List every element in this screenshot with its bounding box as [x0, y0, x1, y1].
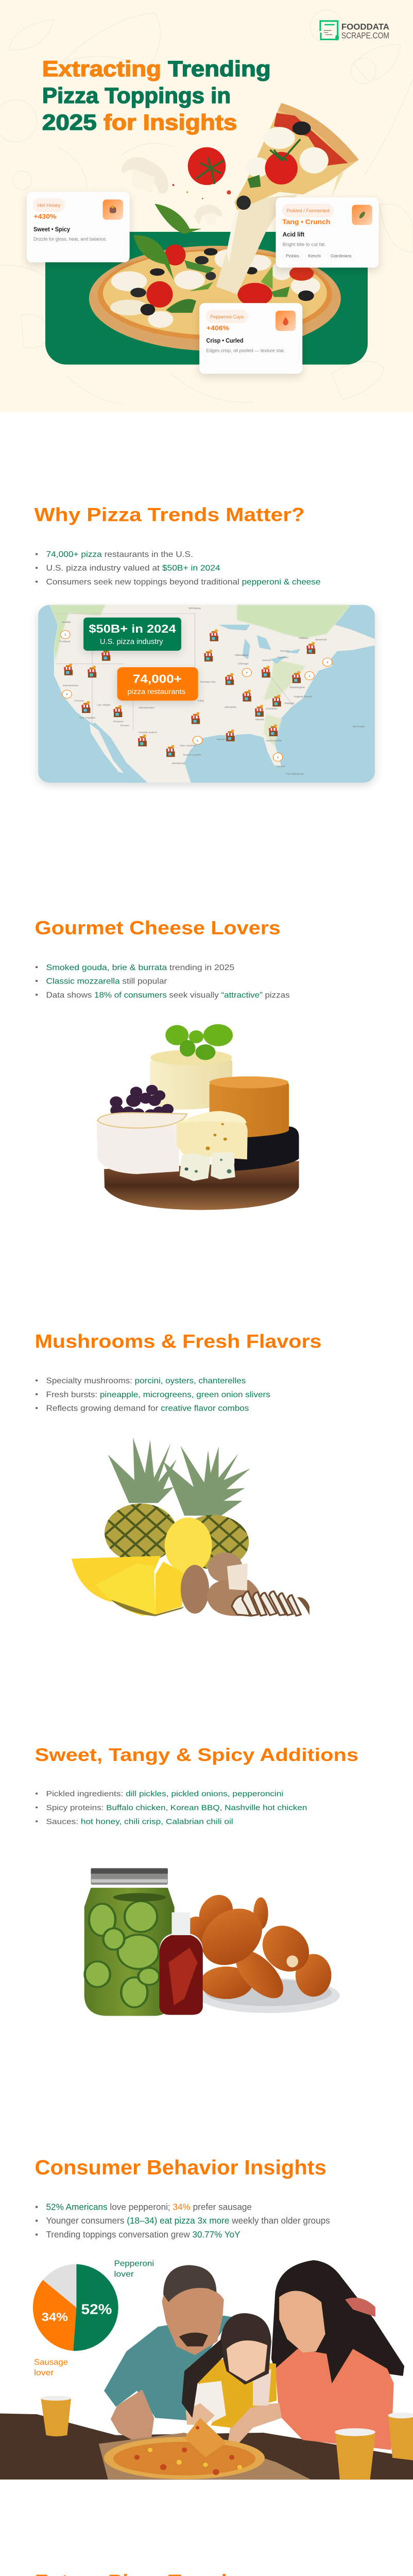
blue cheese cubes — [180, 1153, 211, 1181]
heading: Sweet, Tangy & Spicy Additions — [35, 1745, 358, 1765]
city labels: Albuquerque — [139, 706, 154, 709]
callout: 74,000+ — [117, 667, 198, 701]
bullet list: Data shows 18% of consumers seek visually “attractive” pizzas — [46, 990, 290, 999]
bullet list — [36, 1789, 307, 1826]
heading: Gourmet Cheese Lovers — [35, 917, 281, 939]
store markers — [64, 629, 316, 757]
city labels: Detroit — [262, 659, 271, 662]
top cream cheese — [150, 1050, 232, 1110]
card description: Edges crisp, oil pooled — texture star. — [206, 348, 285, 353]
title: Pizza Toppings in — [42, 83, 231, 108]
city labels: Virginia Beach — [294, 696, 312, 698]
panel: why pizza trends matter — [34, 503, 375, 783]
bullet list: Classic mozzarella still popular — [46, 976, 167, 986]
city labels: Los Angeles — [79, 717, 95, 720]
basil — [165, 1024, 233, 1060]
city labels: Bermuda — [353, 725, 365, 728]
callout: 74,000+: 74,000+ — [133, 672, 182, 686]
city labels: Montréal — [315, 638, 326, 641]
bullet list: 74,000+ pizza restaurants in the U.S. — [46, 549, 193, 559]
pineapple halves and wedges — [165, 1517, 212, 1573]
cluster markers: 2 — [197, 739, 198, 742]
bullet list: Sauces: hot honey, chili crisp, Calabrian chili oil — [46, 1817, 233, 1826]
heading: Consumer Behavior Insights — [35, 2156, 326, 2179]
grapes — [110, 1085, 174, 1121]
woman arm — [228, 2403, 282, 2445]
callout: 74,000+: pizza restaurants — [128, 688, 185, 696]
bullet list: 52% Americans love pepperoni; 34% prefer sausage — [46, 2202, 252, 2212]
illustration: chili oil bottle — [159, 1912, 203, 2015]
paper cups — [41, 2398, 71, 2436]
city labels: Hamilton — [277, 656, 288, 659]
city labels: Chicago — [238, 663, 249, 665]
city labels: Baton Rouge — [217, 738, 234, 741]
title: Extracting Trending — [42, 57, 271, 81]
city labels: Ottawa — [299, 637, 308, 640]
man hand — [111, 2389, 154, 2443]
illustration: cheese board — [97, 1024, 299, 1210]
pineapple bodies — [105, 1503, 177, 1563]
label: pepperoni lover: Pepperoni — [114, 2259, 154, 2268]
card description: Drizzle for gloss, heat, and balance. — [33, 236, 107, 242]
bullet list: Smoked gouda, brie & burrata trending in 2025 — [46, 962, 234, 972]
icon: flame — [276, 311, 296, 331]
stat: +406%: +406% — [206, 324, 230, 332]
pizza — [104, 2437, 265, 2479]
illustration: whole pizza — [89, 235, 341, 351]
panel: mushrooms and fresh flavors — [35, 1330, 322, 1616]
stat: +430%: +430% — [33, 213, 57, 220]
city labels: Sacramento — [63, 684, 78, 687]
girl vest and hoodie — [189, 2359, 277, 2428]
chips: Pickles — [286, 253, 299, 258]
title: 2025 for Insights — [42, 110, 237, 135]
illustration: flying mushrooms, tomato and basil — [121, 147, 231, 234]
woman face — [279, 2291, 325, 2352]
city labels: Tulsa — [197, 700, 204, 702]
cluster markers: 2 — [66, 693, 68, 696]
callout: $50B+: $50B+ in 2024 — [89, 623, 176, 636]
city labels: Memphis — [225, 706, 236, 709]
cluster markers: 2 — [326, 661, 328, 664]
background food doodles — [0, 10, 413, 405]
bullet list: Fresh bursts: pineapple, microgreens, green onion slivers — [46, 1389, 270, 1399]
girl head — [220, 2313, 271, 2385]
logo: FoodData Scrape — [320, 21, 389, 41]
city labels: Monterrey — [172, 762, 185, 765]
cheese wedge — [177, 1111, 248, 1159]
label: pepperoni lover — [114, 2259, 154, 2279]
card heading: Sweet • Spicy — [33, 226, 70, 233]
city labels: Las Vegas — [97, 704, 111, 707]
city labels: San Antonio — [180, 744, 196, 748]
bullet list: Specialty mushrooms: porcini, oysters, chanterelles — [46, 1376, 246, 1385]
city labels: The Bahamas — [286, 773, 304, 775]
icon: honey pot — [102, 199, 123, 220]
cluster markers — [61, 631, 332, 761]
bullet list — [36, 1376, 270, 1413]
pill: Hot Honey — [33, 199, 64, 212]
pizza box — [99, 2433, 311, 2480]
illustration: family sharing pizza — [0, 2260, 413, 2480]
panel: gourmet cheese lovers — [35, 917, 299, 1210]
city labels — [59, 607, 365, 775]
logo: FoodData Scrape: FOODDATA — [341, 23, 389, 32]
callout: $50B+ — [83, 618, 181, 651]
label: sausage lover: Sausage — [34, 2358, 68, 2367]
city labels: Miami — [277, 765, 285, 768]
card: Hot Honey — [27, 192, 130, 262]
city labels: Nuevo Laredo — [183, 754, 201, 756]
mushroom slices — [232, 1591, 301, 1616]
bullet list: Pickled ingredients: dill pickles, pickled onions, pepperoncini — [46, 1789, 283, 1798]
bullet list: Younger consumers (18–34) eat pizza 3x more weekly than older groups — [46, 2216, 330, 2226]
bullet list — [36, 2202, 330, 2240]
city labels: Raleigh — [284, 702, 294, 705]
cluster markers: 3 — [64, 634, 66, 636]
illustration: pizza slice with cheese pull — [216, 103, 359, 294]
map of pizza restaurants — [38, 605, 375, 783]
pie chart: 52% — [81, 2301, 112, 2317]
pineapple crowns — [108, 1437, 250, 1516]
title — [42, 57, 271, 135]
pie chart: 34% — [42, 2311, 68, 2324]
city labels: Toronto — [280, 650, 289, 653]
cluster markers: 2 — [277, 756, 279, 759]
bullet list: Reflects growing demand for creative flavor combos — [46, 1403, 249, 1413]
card heading: Acid lift — [283, 231, 304, 238]
wooden board — [104, 1161, 299, 1210]
label: sausage lover — [34, 2358, 68, 2377]
green panel — [45, 232, 368, 365]
bullet list: Spicy proteins: Buffalo chicken, Korean BBQ, Nashville hot chicken — [46, 1803, 307, 1812]
label: pepperoni lover: lover — [114, 2270, 134, 2279]
city labels: Tucson — [120, 724, 129, 727]
bullet list — [36, 962, 290, 999]
brie wheel — [97, 1123, 179, 1174]
man head — [162, 2286, 224, 2355]
city labels: Portland — [59, 640, 70, 643]
card heading: Crisp • Curled — [206, 337, 244, 344]
woman hoodie — [275, 2349, 394, 2450]
city labels: Washington — [290, 686, 305, 689]
callout: $50B+: U.S. pizza industry — [100, 638, 163, 646]
card: Pickled / Fermented — [276, 197, 379, 267]
card: Hot Honey: Hot Honey — [38, 203, 61, 208]
card: Pickled / Fermented: Pickled / Fermented — [286, 208, 330, 213]
illustration: plate of wings — [184, 1892, 340, 2013]
label: sausage lover: lover — [34, 2368, 54, 2377]
stat: Tang Crunch: Tang • Crunch — [282, 218, 330, 226]
pie chart — [33, 2264, 118, 2351]
bullet list: Consumers seek new toppings beyond traditional pepperoni & cheese — [46, 577, 320, 586]
panel: sweet tangy spicy additions — [35, 1745, 358, 2016]
heading: Mushrooms & Fresh Flavors — [35, 1330, 322, 1352]
bullet list: U.S. pizza industry valued at $50B+ in 2024 — [46, 563, 220, 572]
city labels: Atlanta — [255, 718, 264, 721]
card: Pepperoni Cups — [199, 303, 302, 374]
chips: Giardiniera — [331, 253, 352, 258]
man sweater — [104, 2316, 232, 2420]
woman hair — [271, 2260, 404, 2386]
panel: consumer behavior insights — [0, 2156, 413, 2480]
wood table — [0, 2414, 413, 2480]
heading: Why Pizza Trends Matter? — [34, 503, 305, 526]
city labels: Fresno — [75, 700, 83, 702]
mushrooms — [181, 1565, 209, 1614]
orange cheese — [210, 1077, 289, 1138]
pill: Pickled / Fermented — [283, 204, 334, 217]
city labels: Phoenix — [113, 720, 124, 723]
city labels: Kansas City — [200, 681, 216, 684]
city labels: Ciudad Juárez — [139, 731, 158, 734]
bullet list: Trending toppings conversation grew 30.77% YoY — [46, 2230, 240, 2240]
city labels: Seattle — [62, 621, 71, 624]
cluster markers: 2 — [308, 675, 311, 677]
icon: pickle — [352, 205, 372, 225]
pill: Pepperoni Cups — [206, 310, 248, 323]
city labels: Winnipeg — [188, 607, 201, 610]
hero background — [0, 0, 413, 412]
city labels: Jacksonville — [266, 739, 282, 742]
city labels: Milwaukee — [235, 654, 249, 657]
black wax cheese — [234, 1127, 299, 1171]
chips — [283, 251, 355, 261]
logo: FoodData Scrape: SCRAPE.COM — [341, 31, 389, 40]
illustration: pickle jar — [84, 1868, 175, 2016]
card description: Bright bite to cut fat. — [283, 242, 326, 247]
chips: Kimchi — [308, 253, 321, 258]
cluster markers: 2 — [246, 671, 248, 674]
panel: hero — [0, 10, 413, 405]
backpack — [345, 2298, 375, 2317]
illustration: pineapples and mushrooms — [72, 1437, 309, 1616]
bullet list — [36, 549, 320, 586]
city labels: Charlotte — [266, 707, 277, 710]
card: Pepperoni Cups: Pepperoni Cups — [210, 314, 244, 319]
